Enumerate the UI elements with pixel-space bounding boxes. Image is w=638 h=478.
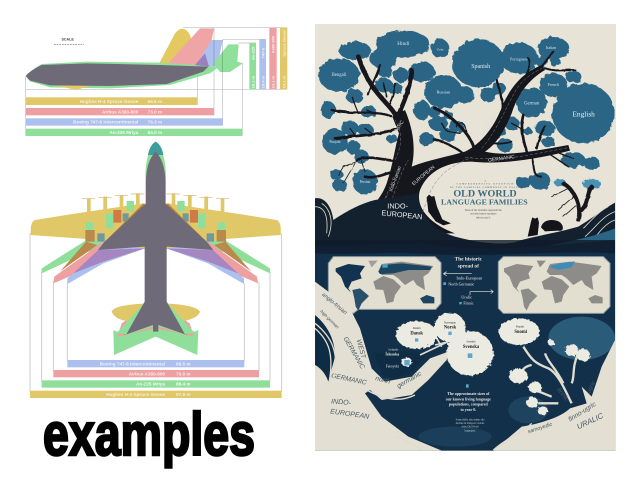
label: Spanish: Spanish [471, 64, 490, 70]
vertical bar: 747-8 height [259, 39, 266, 89]
label: Islenska: Icelandic [388, 349, 399, 352]
Germanic branch lines [420, 327, 455, 355]
dark blue sea [315, 240, 615, 451]
scale label: SCALE [61, 38, 74, 42]
overlap: shared grey silhouette [98, 142, 213, 335]
hand-lettered root labels: GERMANIC [342, 336, 366, 371]
hand-lettered root labels: high-german [319, 309, 340, 330]
label: Svenska: Swedish [466, 341, 476, 344]
panel: side-view aircraft comparison [26, 28, 287, 136]
legend: Indo-European: North Germanic [448, 281, 475, 286]
poster title: OF THE FAMILIES COMMONLY IN USAGE [450, 186, 521, 189]
map: Scandinavia marker [382, 264, 388, 268]
tree trunk [348, 65, 570, 233]
upper sea darkness [315, 240, 615, 255]
engines: overlapping nacelles [85, 201, 226, 242]
silhouette: Boeing 747-8 [67, 215, 244, 284]
vertical bar: A380 height [269, 28, 277, 89]
label: Hindi: Hindi [397, 41, 410, 47]
caption: fine print: languages. [464, 429, 476, 432]
Finnic branch lines [520, 347, 578, 403]
label: Suomi [514, 326, 528, 335]
fuselage silhouette [26, 53, 218, 90]
bar: Airbus A380 span: 79.8 m [176, 371, 190, 376]
sea swirls right [315, 203, 615, 242]
spread heading [455, 257, 483, 269]
bar: Boeing 747-8 span: Boeing 747-8 Intercontinental [100, 361, 165, 366]
hand-lettered root labels: samoyedic [527, 422, 553, 435]
bar: Hughes H-4 span: 97.8 m [176, 392, 190, 397]
overlap tones: brown and orange [60, 203, 251, 335]
bar: Boeing 747-8 length: Boeing 747-8 Intercontinental [73, 120, 138, 125]
panel: world map left [328, 257, 441, 313]
map: Australia blue [420, 295, 434, 303]
label: Suomi: Finnish [516, 326, 525, 329]
label: German: German [524, 101, 540, 106]
hand-lettered root labels: north [375, 375, 391, 386]
hand-lettered root labels: GERMANIC [331, 372, 367, 387]
legend: Uralic: Uralic [461, 295, 472, 300]
map: grey continents [504, 261, 603, 311]
label: Portuguese: Portuguese [510, 57, 528, 62]
label: Russian: Russian [436, 89, 451, 94]
bar: Boeing 747-8 length [26, 118, 223, 126]
branch highlights [358, 68, 568, 227]
hand-lettered root labels: URALIC [575, 411, 605, 431]
label: Germanic branch: GERMANIC [488, 154, 516, 164]
map: Uralic blue highlight [548, 261, 575, 270]
panel: language tree [315, 31, 615, 250]
label: Dansk [410, 327, 423, 336]
tree branches [332, 52, 592, 220]
legend: Uralic: Finnic [463, 301, 474, 306]
hand-lettered root labels [319, 292, 605, 435]
wave highlight [528, 228, 615, 250]
label: Dansk: Dansk [410, 331, 423, 336]
label: Norsk: Norwegian [444, 321, 457, 324]
label: Persian: Persian [360, 180, 371, 184]
language blobs [318, 31, 615, 194]
caption: fine print: Some shifts also mimic the [456, 418, 485, 421]
label: Italic branch: ROMANCE [481, 114, 497, 137]
bar: Airbus A380 length: 73.0 m [148, 109, 162, 114]
label: Bengali: Bengali [332, 73, 347, 78]
bar: Boeing 747-8 span: 68.5 m [176, 361, 190, 366]
vertical bar: An-225 height [249, 43, 256, 89]
label: Svenska [463, 341, 480, 350]
vertical bar: Spruce Goose height: Spruce Goose [281, 29, 286, 57]
map: Greenland grey [368, 261, 378, 267]
label: Italian: Italian [546, 45, 556, 50]
small blue marker [466, 384, 469, 388]
blue population markers [404, 332, 472, 365]
vertical bar: Spruce Goose height: 24.1 m [281, 75, 286, 88]
poster title: before year 0. [476, 216, 491, 219]
lighter sea patches [418, 317, 615, 447]
label: Dansk: Danish [413, 327, 421, 330]
bar: Boeing 747-8 span [67, 360, 244, 367]
panel: top-view aircraft comparison [30, 142, 282, 398]
poster title: A [484, 179, 486, 182]
label: English: English [572, 110, 595, 119]
bar: Hughes H-4 span: Hughes H-4 Spruce Goose [106, 392, 165, 397]
vertical bar: An-225 height: 18.1 m [250, 75, 255, 88]
legend: Indo-European [443, 272, 483, 286]
bar: An-225 length: An-225 Mriya [109, 130, 139, 135]
bar: An-225 length [26, 129, 242, 136]
bar: Airbus A380 length: Airbus A380-800 [102, 109, 139, 114]
icon: cat silhouette [427, 195, 451, 225]
label: European branch: EUROPEAN [411, 164, 437, 187]
vertical bar: A380 height: 24.1 m [271, 75, 276, 88]
caption: fine print: older Old World [461, 426, 479, 429]
population blobs [396, 313, 590, 415]
scale label [54, 38, 84, 45]
map: Eurasia blue band [378, 263, 432, 274]
hand-lettered root labels: germanic [396, 370, 424, 390]
small light-blue blobs [554, 179, 601, 189]
label: Indo-Iranian branch: Indo-Iranian [388, 165, 403, 193]
vertical bar: A380 height: A380-800 [271, 35, 276, 53]
label: Suomi: Suomi [514, 330, 528, 335]
bar: Hughes H-4 length: 66.6 m [148, 99, 162, 104]
spread heading: spread of [458, 263, 479, 269]
label: Indic branch: INDIC [393, 119, 406, 134]
poster title [441, 179, 528, 219]
wingspan guide lines [30, 233, 282, 392]
caption: approximate sizes: to year 0. [460, 407, 476, 412]
bar: Hughes H-4 length [26, 97, 197, 105]
map: Africa grey [373, 276, 401, 303]
caption: approximate sizes: The approximate sizes of [447, 391, 490, 396]
label: Svenska: Svenska [463, 345, 480, 350]
panel: world map right [498, 257, 610, 313]
hand-lettered root labels: EUROPEAN [330, 408, 370, 421]
map: North America blue [336, 264, 365, 293]
poster background [315, 24, 616, 451]
map: Eurasia grey [378, 262, 433, 290]
bar: An-225 span: An-225 Mriya [136, 382, 165, 387]
bar: Airbus A380 span: Airbus A380-800 [129, 371, 165, 376]
panel: Old World Language Families poster [315, 24, 616, 451]
bar: Hughes H-4 span [30, 391, 282, 398]
label: Indo-European trunk: INDO- [387, 201, 409, 210]
vertical bar: An-225 height: An-225 [250, 46, 255, 60]
icon: cat and beaver silhouettes [528, 217, 563, 237]
vertical bar: 747-8 height: 747-8 [260, 47, 265, 58]
bar: Airbus A380 span [53, 370, 259, 377]
legend: Uralic [459, 290, 493, 306]
silhouette: An-225 Mriya [42, 207, 270, 355]
bar: An-225 length: 84.0 m [148, 130, 162, 135]
legend: Indo-European: Indo-European [456, 276, 483, 281]
poster title: recorded native speakers [470, 213, 496, 216]
guide lines [26, 28, 287, 135]
root and sea mass [315, 193, 615, 250]
panel: historic spread and language map [315, 240, 615, 451]
caption: approximate sizes: our known living language [446, 396, 491, 401]
hand-lettered root labels: WEST [355, 339, 367, 360]
label: Urdu: Urdu [437, 47, 444, 51]
land: dark inlets [315, 315, 425, 382]
silhouette: Airbus A380 [53, 212, 258, 337]
vertical bar: Spruce Goose height [280, 28, 287, 89]
tail fins [158, 28, 243, 72]
vertical bar: 747-8 height: 19.4 m [260, 75, 265, 88]
heading: examples: examples [43, 401, 255, 468]
caption: approximate sizes: populations, compared [449, 402, 489, 407]
map: South America [352, 288, 369, 311]
hand-lettered root labels: ugric [586, 380, 597, 394]
bar: An-225 span: 88.4 m [176, 382, 190, 387]
label: Norsk [444, 321, 457, 331]
poster title: COMPREHENSIVE OVERVIEW [457, 183, 514, 186]
land: right cream coast with Finno-Ugric roots [493, 340, 615, 451]
white coastline strokes [315, 323, 532, 450]
poster title: OLD WORLD [453, 189, 517, 199]
label: Indo-European trunk: EUROPEAN [381, 208, 423, 221]
caption: fine print [456, 418, 485, 432]
bar: Airbus A380 length [26, 108, 214, 115]
hand-lettered root labels: finnic [555, 387, 571, 403]
label: Islenska: Íslenska [385, 352, 399, 357]
hand-lettered root labels: INDO- [331, 398, 352, 407]
label: Punjabi: Punjabi [329, 140, 341, 144]
caption: fine print: decline in diaspora various [456, 422, 484, 425]
hand-lettered root labels: anglo-frisian [320, 292, 348, 316]
hand-lettered root labels: finno-ugric [567, 401, 598, 423]
spread heading: The historic [455, 257, 483, 263]
label: Islenska [385, 349, 399, 357]
land: left cream coast with Germanic roots [315, 282, 448, 451]
poster title: LANGUAGE FAMILIES [441, 199, 528, 207]
silhouette: Hughes H-4 Spruce Goose [31, 193, 281, 322]
bar: Boeing 747-8 length: 76.3 m [148, 120, 162, 125]
poster title: Sizes of the branches represent the [465, 209, 503, 212]
label: Norsk: Norsk [444, 326, 456, 331]
bar: An-225 span [42, 380, 270, 388]
label: French: French [548, 82, 559, 87]
label: Indo-European trunk [381, 201, 423, 221]
caption: approximate sizes [446, 391, 491, 412]
label: Foroyskt: Føroyskt [386, 364, 399, 368]
bar: Hughes H-4 length: Hughes H-4 Spruce Goose [80, 99, 139, 104]
